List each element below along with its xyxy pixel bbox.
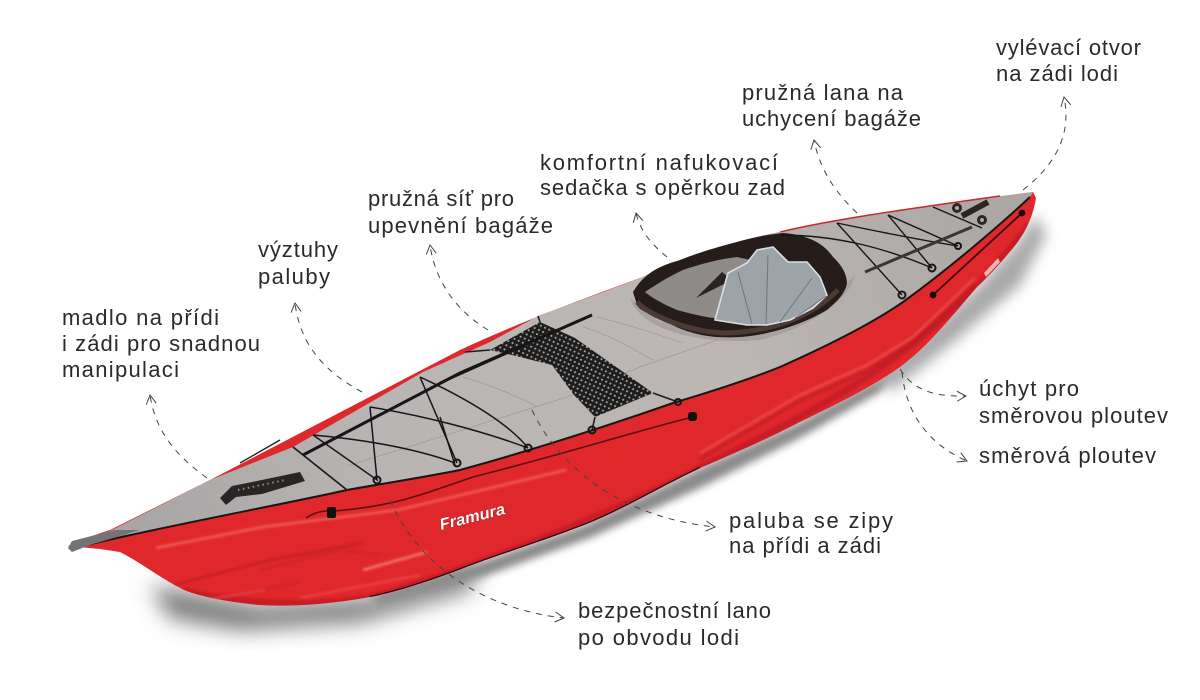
leader: směrová ploutev [902, 372, 967, 461]
main hull highlight [156, 470, 566, 548]
label: pružná lana: pružná lana na [742, 80, 904, 105]
stern ridge shade [700, 284, 975, 459]
cockpit interior [645, 257, 760, 322]
kayak [68, 192, 1036, 606]
label: bezpečnostní lano: po obvodu lodi [578, 625, 739, 650]
net corner cords [465, 316, 678, 430]
deck edge seam [87, 197, 1030, 545]
safety rope stern side [930, 210, 1025, 298]
bow bungee cords [293, 315, 681, 490]
seat folds [738, 255, 826, 324]
streaks [174, 543, 363, 585]
label: směrová ploutev: směrová ploutev [979, 443, 1156, 468]
label: paluba se zipy: paluba se zipy [729, 508, 893, 533]
leader: výztuhy [295, 303, 362, 392]
top edge line [240, 440, 280, 463]
cockpit rim [633, 233, 847, 337]
hull shading [156, 225, 1030, 603]
leader: paluba se zipy [532, 410, 715, 527]
deck seams [347, 317, 717, 466]
dashed leader lines [150, 97, 1066, 618]
leader: bezpečnostní lano [390, 500, 564, 618]
keel edge [370, 468, 700, 597]
stern handle [954, 202, 988, 224]
leader: sedačka [636, 213, 667, 257]
bow handle [220, 472, 305, 505]
cockpit shadow [630, 275, 855, 341]
safety rope bow side [306, 412, 697, 518]
leader: madlo [150, 395, 207, 478]
net mesh [490, 322, 653, 417]
leader: úchyt [900, 369, 966, 396]
bow tip [68, 530, 140, 552]
label: výztuhy paluby: výztuhy [258, 237, 338, 262]
label: paluba se zipy: na přídi a zádi [729, 533, 881, 558]
label: madlo: i zádi pro snadnou [62, 331, 260, 356]
stern ridge highlight [700, 278, 975, 453]
bow shadow [150, 565, 480, 630]
hull shadow [370, 367, 900, 604]
label: komfortní sedačka: sedačka s opěrkou zad [540, 175, 785, 200]
cargo net [440, 315, 678, 430]
hull [68, 192, 1036, 606]
stern bungee cords [780, 207, 982, 298]
label: madlo: manipulaci [62, 357, 179, 382]
label: komfortní sedačka: komfortní nafukovací [540, 150, 778, 175]
label: úchyt: směrovou ploutev [979, 403, 1168, 428]
seat strap [696, 272, 732, 298]
label: výztuhy paluby: paluby [258, 264, 330, 289]
ground shadow [150, 215, 1046, 630]
label: pružná lana: uchycení bagáže [742, 106, 921, 131]
seat backrest [715, 247, 827, 325]
label: madlo: madlo na přídi [62, 305, 219, 330]
lower hull shade [184, 225, 1030, 603]
label: bezpečnostní lano: bezpečnostní lano [578, 598, 771, 623]
lower streak [363, 552, 427, 570]
stern shadow [880, 215, 1046, 392]
cockpit [630, 233, 855, 341]
Framura logo: Framura [438, 501, 507, 534]
cockpit rim front [637, 290, 838, 333]
leader: pružná síť [430, 245, 488, 330]
leader: pružná lana [814, 140, 857, 213]
label: úchyt: úchyt pro [979, 376, 1079, 401]
net strap [440, 315, 592, 383]
leader: vylévací otvor [1023, 97, 1066, 190]
label: pružná síť: upevnění bagáže [368, 213, 553, 238]
deck [68, 192, 1033, 552]
stern logo [984, 258, 1000, 277]
label: vylévací otvor: na zádi lodi [996, 61, 1118, 86]
label: vylévací otvor: vylévací otvor [996, 35, 1141, 60]
label: pružná síť: pružná síť pro [368, 186, 514, 211]
